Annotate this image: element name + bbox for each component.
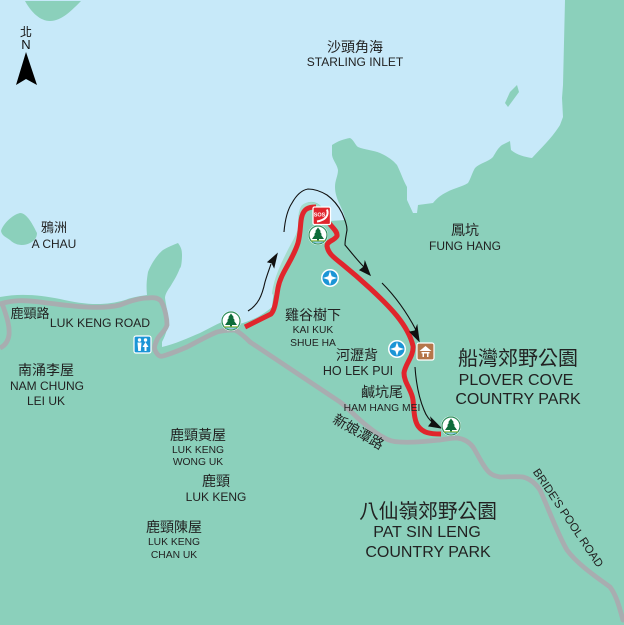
label: Luk Keng Wong Uk: LUK KENG bbox=[172, 445, 224, 456]
icon: tree, Kai Kuk Shue Ha bbox=[308, 225, 328, 245]
label: Fung Hang bbox=[429, 222, 501, 253]
direction arrow 2 bbox=[284, 189, 370, 275]
direction arrow 4 bbox=[415, 367, 441, 428]
island: small northern islet bbox=[505, 85, 519, 107]
label: A Chau: A CHAU bbox=[32, 237, 76, 251]
direction arrow 1 bbox=[248, 254, 277, 311]
label: Luk Keng Chan Uk: CHAN UK bbox=[151, 550, 197, 561]
label: Ham Hang Mei: 鹹坑尾 bbox=[361, 384, 403, 400]
island: A Chau bbox=[1, 213, 37, 245]
label: Pat Sin Leng Country Park bbox=[359, 501, 497, 561]
icon: SOS telephone: SOS bbox=[314, 212, 326, 218]
icon: toilet bbox=[134, 336, 151, 353]
label: Luk Keng Wong Uk: 鹿頸黃屋 bbox=[170, 427, 226, 443]
label: Starling Inlet: 沙頭角海 bbox=[327, 39, 383, 55]
label: Nam Chung Lei Uk: 南涌李屋 bbox=[18, 362, 74, 378]
label: Nam Chung Lei Uk bbox=[10, 362, 84, 408]
label: Luk Keng Chan Uk: LUK KENG bbox=[148, 537, 200, 548]
label: Luk Keng Road: LUK KENG ROAD bbox=[50, 316, 150, 330]
label: Pat Sin Leng Country Park: PAT SIN LENG bbox=[373, 524, 481, 541]
road: Shing Lo Tam Road and Bride's Pool Road bbox=[250, 342, 623, 620]
label: Pat Sin Leng Country Park: COUNTRY PARK bbox=[365, 544, 491, 561]
label: Ham Hang Mei bbox=[344, 384, 420, 414]
label: Ham Hang Mei: HAM HANG MEI bbox=[344, 403, 420, 414]
label: Ho Lek Pui: 河瀝背 bbox=[336, 347, 378, 363]
label: A Chau: 鴉洲 bbox=[41, 220, 67, 235]
icon: compass marker, lower bbox=[388, 340, 406, 358]
north arrow: N bbox=[21, 37, 31, 52]
icon: pavilion bbox=[417, 343, 434, 360]
label: Plover Cove Country Park: PLOVER COVE bbox=[459, 372, 573, 389]
north arrow bbox=[16, 25, 37, 85]
label: Fung Hang: FUNG HANG bbox=[429, 239, 501, 253]
label: Shing Lo Tam Road: 新娘潭路 bbox=[330, 411, 387, 453]
label: Luk Keng Chan Uk bbox=[146, 519, 202, 561]
label: Starling Inlet bbox=[307, 39, 404, 69]
island: north-west headland bbox=[25, 1, 81, 21]
label: Luk Keng Wong Uk bbox=[170, 427, 226, 468]
label: Kai Kuk Shue Ha: 雞谷樹下 bbox=[285, 307, 341, 323]
label: A Chau bbox=[32, 220, 76, 251]
shoreline highlight bbox=[274, 204, 328, 293]
label: Starling Inlet: STARLING INLET bbox=[307, 55, 404, 69]
icon: tree, Ham Hang Mei bbox=[441, 416, 461, 436]
label: Nam Chung Lei Uk: LEI UK bbox=[27, 394, 65, 408]
road: Luk Keng Road bbox=[0, 298, 250, 356]
label: Luk Keng bbox=[186, 473, 246, 504]
label: Bride's Pool Road: BRIDE'S POOL ROAD bbox=[530, 467, 605, 570]
label: Luk Keng: LUK KENG bbox=[186, 490, 246, 504]
label: Ho Lek Pui bbox=[323, 347, 393, 378]
icon: compass marker, upper bbox=[321, 269, 339, 287]
label: Plover Cove Country Park: COUNTRY PARK bbox=[455, 391, 581, 408]
label: Ho Lek Pui: HO LEK PUI bbox=[323, 364, 393, 378]
hiking route bbox=[245, 207, 441, 434]
icon: tree, Luk Keng bbox=[221, 311, 241, 331]
label: Nam Chung Lei Uk: NAM CHUNG bbox=[10, 379, 84, 393]
icon: SOS telephone bbox=[313, 207, 330, 224]
north arrow: 北 bbox=[20, 25, 32, 39]
label: Plover Cove Country Park bbox=[455, 347, 581, 408]
label: Kai Kuk Shue Ha: SHUE HA bbox=[290, 338, 336, 349]
label: Kai Kuk Shue Ha bbox=[285, 307, 341, 349]
label: Luk Keng Road: 鹿頸路 bbox=[10, 306, 50, 321]
road: western spur bbox=[0, 303, 9, 348]
label: Kai Kuk Shue Ha: KAI KUK bbox=[293, 325, 333, 336]
label: Luk Keng Chan Uk: 鹿頸陳屋 bbox=[146, 519, 202, 535]
label: Luk Keng: 鹿頸 bbox=[202, 473, 230, 489]
label: Pat Sin Leng Country Park: 八仙嶺郊野公園 bbox=[359, 501, 497, 523]
label: Luk Keng Wong Uk: WONG UK bbox=[173, 457, 223, 468]
label: Plover Cove Country Park: 船灣郊野公園 bbox=[458, 347, 578, 370]
label: Luk Keng Road bbox=[10, 306, 150, 330]
direction arrow 3 bbox=[382, 283, 419, 341]
label: Fung Hang: 鳳坑 bbox=[451, 222, 479, 238]
